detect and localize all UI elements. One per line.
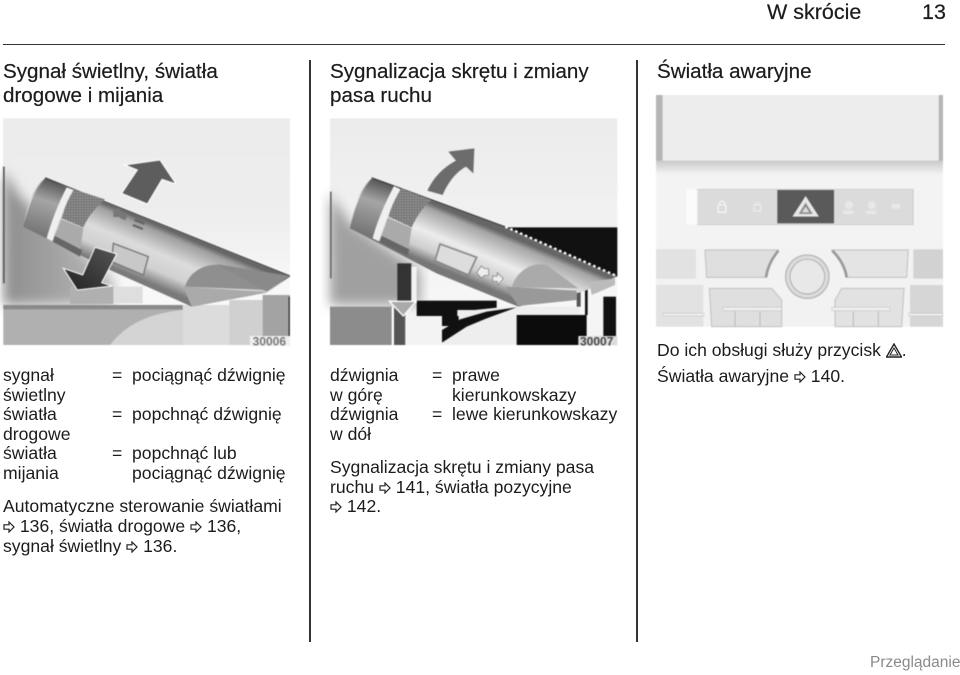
column 2 note	[330, 457, 594, 516]
column 1 note: sygnał świetlny 136.	[3, 536, 177, 556]
button row	[686, 189, 913, 225]
heading: hazard lights: Światła awaryjne	[657, 60, 812, 83]
figure: hazard button panel	[656, 94, 944, 328]
arrow down	[389, 301, 416, 316]
heading: high and low beam: Sygnał świetlny, światła	[3, 60, 218, 83]
figure: lever high beam	[0, 118, 291, 348]
arrow down	[63, 247, 117, 290]
column 2 definitions: w górę	[330, 385, 383, 405]
heading: turn signals	[330, 60, 589, 107]
column 1 definitions: =	[112, 404, 122, 424]
column 3 note	[657, 340, 907, 386]
column 1 note	[3, 496, 282, 556]
heading: high and low beam	[3, 60, 218, 107]
column 1 definitions	[3, 365, 286, 483]
lever	[350, 178, 617, 307]
column 1 definitions: =	[112, 365, 122, 385]
lever	[23, 178, 290, 307]
arrow curved up	[427, 148, 474, 195]
column 2 definitions: =	[432, 404, 442, 424]
column 1 definitions: popchnąć dźwignię	[132, 404, 282, 424]
column 2 definitions: dźwignia	[330, 404, 398, 424]
column 2 note: 142.	[347, 496, 381, 516]
column 2 note: Sygnalizacja skrętu i zmiany pasa	[330, 457, 594, 477]
column 1 definitions: drogowe	[3, 424, 70, 444]
hazard button	[777, 190, 834, 223]
column 1 definitions: pociągnąć dźwignię	[132, 365, 286, 385]
footer link: Przeglądanie	[870, 654, 960, 671]
heading: turn signals: pasa ruchu	[330, 84, 432, 107]
column 2 note: ruchu 141, światła pozycyjne	[330, 477, 572, 497]
figure: lever turn signal	[322, 118, 618, 348]
column 2 definitions: prawe	[452, 365, 500, 385]
heading: high and low beam: drogowe i mijania	[3, 84, 163, 107]
column 1 definitions: światła	[3, 404, 57, 424]
column 1 definitions: sygnał	[3, 365, 54, 385]
column 2 definitions: dźwignia	[330, 365, 398, 385]
header title: W skrócie	[767, 0, 861, 24]
figure number: 30006	[253, 334, 286, 348]
vents and knob	[656, 247, 943, 327]
column 2 definitions: lewe kierunkowskazy	[452, 404, 617, 424]
column 2 definitions: w dół	[330, 424, 371, 444]
arrow up	[122, 160, 176, 204]
column 1 definitions: świetlny	[3, 385, 66, 405]
column 2 definitions: kierunkowskazy	[452, 385, 576, 405]
column 2 definitions	[330, 365, 618, 444]
column 1 definitions: pociągnąć dźwignię	[132, 463, 286, 483]
column 1 definitions: popchnąć lub	[132, 443, 237, 463]
figure number: 30007	[580, 334, 614, 348]
column 1 note: Automatyczne sterowanie światłami	[3, 496, 282, 516]
column 1 note: 136, światła drogowe 136,	[20, 516, 241, 536]
column 3 note: Do ich obsługi służy przycisk .	[657, 340, 907, 360]
column 3 note: Światła awaryjne 140.	[657, 366, 845, 386]
heading: turn signals: Sygnalizacja skrętu i zmiany	[330, 60, 589, 83]
column 1 definitions: =	[112, 443, 122, 463]
column 1 definitions: mijania	[3, 463, 59, 483]
page number: 13	[922, 0, 946, 24]
column 1 definitions: światła	[3, 443, 57, 463]
column 2 definitions: =	[432, 365, 442, 385]
